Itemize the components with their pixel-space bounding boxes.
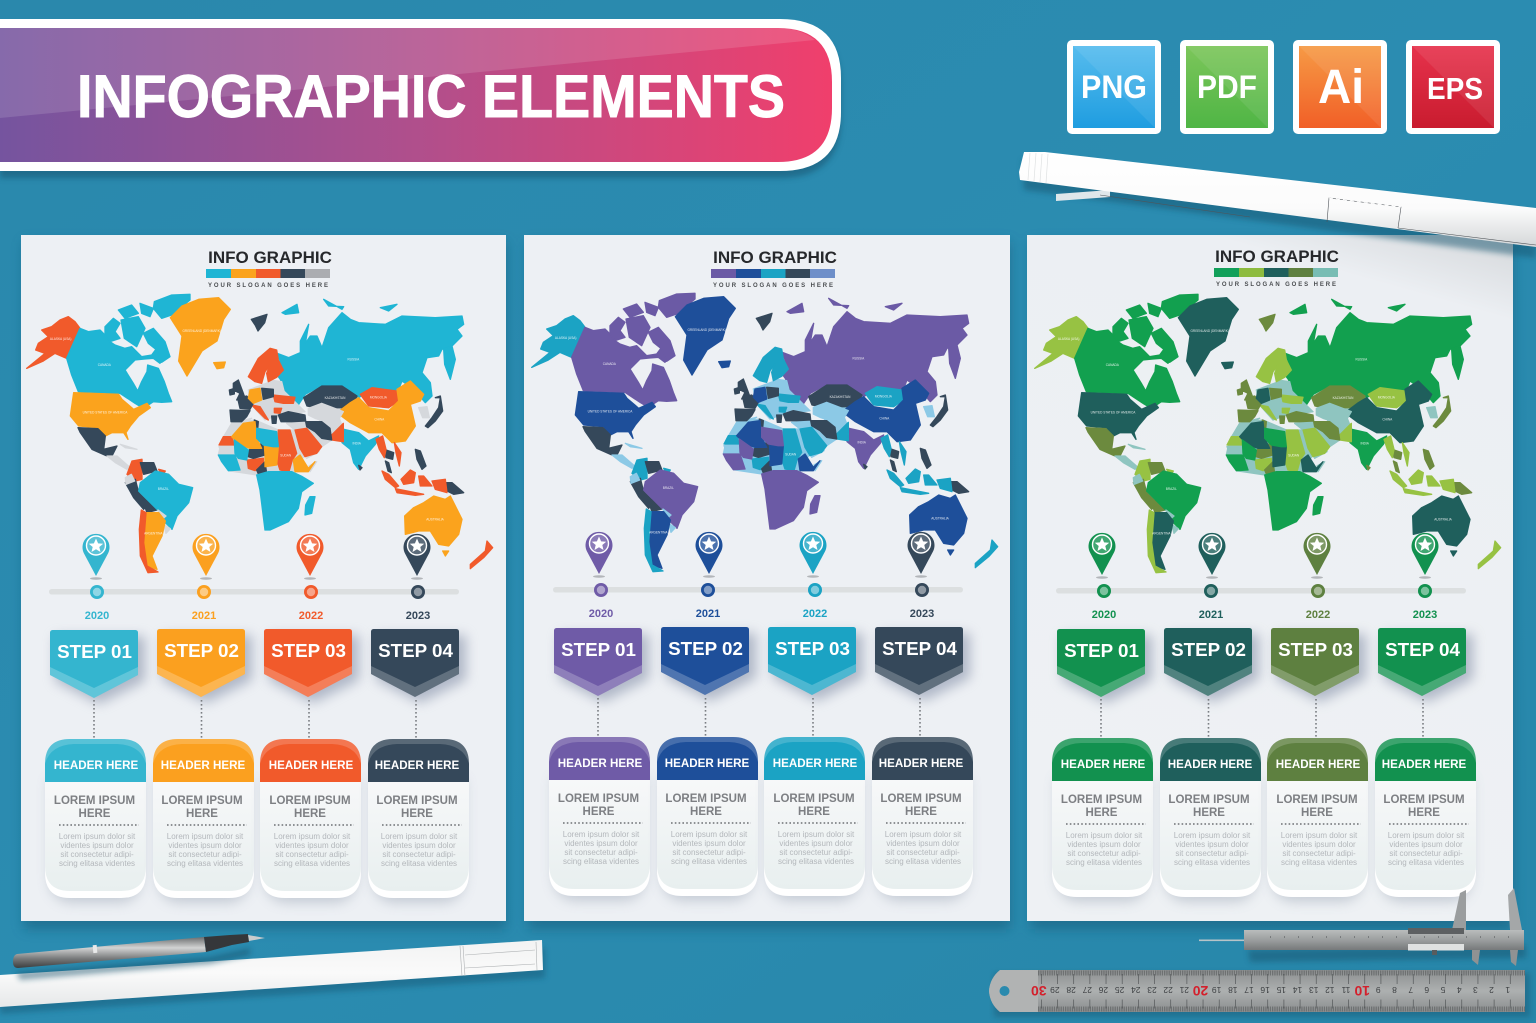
card 3: sit consectetur adipi- xyxy=(1282,849,1356,858)
card 2: Lorem ipsum dolor sit xyxy=(671,830,748,839)
caliper xyxy=(1199,888,1526,966)
panel heading xyxy=(206,248,332,289)
map country labels: GREENLAND (DENMARK) xyxy=(687,328,726,332)
ruler numbers: 2 xyxy=(1489,985,1494,995)
map country labels: CANADA xyxy=(1106,363,1120,367)
ruler numbers: 18 xyxy=(1228,985,1238,995)
ruler numbers: 27 xyxy=(1082,985,1092,995)
step column 2 xyxy=(1160,533,1261,902)
connector 2 xyxy=(200,700,202,738)
world map xyxy=(1035,294,1501,573)
map pin 4 xyxy=(908,532,934,578)
step 04 arrow: STEP 04 xyxy=(378,640,453,661)
card 3: videntes ipsum dolor xyxy=(275,841,349,850)
panel heading: INFO GRAPHIC xyxy=(1215,247,1339,266)
ruler numbers: 10 xyxy=(1354,983,1370,999)
step 02 arrow: STEP 02 xyxy=(668,638,743,659)
map pin 1 xyxy=(82,534,110,580)
panel heading: YOUR SLOGAN GOES HERE xyxy=(1216,282,1336,288)
map country labels: BRAZIL xyxy=(663,486,674,490)
step column 3 xyxy=(1267,533,1368,902)
map pin 3 xyxy=(296,534,324,580)
icon: PDF badge xyxy=(1180,40,1274,134)
map country labels: AUSTRALIA xyxy=(1434,517,1453,521)
step column 3 xyxy=(764,532,865,901)
icon: PNG badge: PNG xyxy=(1081,69,1147,105)
card 3: Lorem ipsum dolor sit xyxy=(1281,831,1358,840)
ruler numbers: 24 xyxy=(1131,985,1141,995)
map country labels: SUDAN xyxy=(785,453,797,457)
connector 2 xyxy=(1208,699,1210,737)
ruler numbers: 7 xyxy=(1408,985,1413,995)
step column 1 xyxy=(45,534,146,903)
card 2: Lorem ipsum dolor sit xyxy=(1174,831,1251,840)
card 3: HERE xyxy=(798,806,830,818)
card 3 xyxy=(1267,738,1368,902)
step 03 arrow: STEP 03 xyxy=(271,640,346,661)
step column 1 xyxy=(1052,533,1153,902)
timeline dot 1 xyxy=(90,585,104,599)
panel heading: YOUR SLOGAN GOES HERE xyxy=(208,283,328,289)
map country labels: INDIA xyxy=(1360,441,1370,445)
timeline dot 2 xyxy=(701,583,715,597)
map country labels: KAZAKHSTAN xyxy=(325,396,346,400)
step 04 arrow xyxy=(875,627,970,701)
timeline dot 1 xyxy=(1097,584,1111,598)
ruler numbers: 16 xyxy=(1260,985,1270,995)
ruler numbers: 4 xyxy=(1457,985,1462,995)
card 4 xyxy=(1375,738,1476,902)
card 3: LOREM IPSUM xyxy=(269,795,351,807)
map pin 1 xyxy=(586,532,612,578)
ruler numbers xyxy=(1031,983,1510,999)
step 04 arrow: STEP 04 xyxy=(1385,639,1460,660)
card 1: videntes ipsum dolor xyxy=(60,841,134,850)
map pin 4 xyxy=(404,534,430,580)
connector 1 xyxy=(93,700,95,738)
timeline dot 4 xyxy=(1418,584,1432,598)
card 1: videntes ipsum dolor xyxy=(564,839,638,848)
card 4: Lorem ipsum dolor sit xyxy=(1388,831,1465,840)
card 3: scing elitasa videntes xyxy=(778,857,854,866)
step 01 arrow: STEP 01 xyxy=(561,639,636,660)
step 02 arrow xyxy=(1164,628,1259,702)
panel: purple blue infographic xyxy=(524,235,1010,921)
map country labels: INDIA xyxy=(857,440,867,444)
ruler numbers: 9 xyxy=(1376,985,1381,995)
map pin 3 xyxy=(800,532,826,578)
card 3 xyxy=(764,737,865,901)
panel heading: YOUR SLOGAN GOES HERE xyxy=(713,283,833,289)
ruler numbers: 3 xyxy=(1473,985,1478,995)
card 2: videntes ipsum dolor xyxy=(168,841,242,850)
timeline dot 2 xyxy=(1204,584,1218,598)
step 04 arrow: STEP 04 xyxy=(882,638,957,659)
card 2: Lorem ipsum dolor sit xyxy=(167,832,244,841)
map country labels xyxy=(1058,329,1453,535)
year 2021: 2021 xyxy=(696,608,720,620)
map country labels: UNITED STATES OF AMERICA xyxy=(588,410,633,414)
card 1: scing elitasa videntes xyxy=(59,859,135,868)
timeline bar xyxy=(49,589,459,594)
map country labels: GREENLAND (DENMARK) xyxy=(182,329,221,333)
panel heading xyxy=(1214,247,1339,288)
card 2: HERE xyxy=(1193,807,1225,819)
panel sheet xyxy=(1027,235,1513,921)
map pin 3 xyxy=(1304,533,1330,579)
year 2020: 2020 xyxy=(1092,609,1116,621)
card 3: HERE xyxy=(294,808,326,820)
year 2022: 2022 xyxy=(299,610,323,622)
card 4: HERE xyxy=(401,808,433,820)
map country labels: ALASKA (USA) xyxy=(1058,337,1079,341)
panel heading xyxy=(711,248,837,289)
card 3: LOREM IPSUM xyxy=(1276,794,1358,806)
map country labels xyxy=(555,328,950,534)
card 2: sit consectetur adipi- xyxy=(168,850,242,859)
card 4: HEADER HERE xyxy=(1382,758,1466,771)
card 1 xyxy=(1052,738,1153,902)
map country labels: RUSSIA xyxy=(1355,357,1368,361)
map country labels: SUDAN xyxy=(1288,454,1300,458)
map country labels: GREENLAND (DENMARK) xyxy=(1190,329,1229,333)
ruler numbers: 1 xyxy=(1505,985,1510,995)
icon: EPS badge xyxy=(1406,40,1500,134)
connector 3 xyxy=(308,700,310,738)
map country labels: UNITED STATES OF AMERICA xyxy=(83,411,128,415)
ruler numbers: 30 xyxy=(1031,983,1047,999)
year 2022: 2022 xyxy=(1306,609,1330,621)
map country labels: KAZAKHSTAN xyxy=(830,395,851,399)
card 1: Lorem ipsum dolor sit xyxy=(59,832,136,841)
map country labels: KAZAKHSTAN xyxy=(1333,396,1354,400)
card 1: scing elitasa videntes xyxy=(1066,858,1142,867)
card 2: LOREM IPSUM xyxy=(665,793,747,805)
map country labels: BRAZIL xyxy=(1166,487,1177,491)
card 4: videntes ipsum dolor xyxy=(382,841,456,850)
card 1: HEADER HERE xyxy=(1061,758,1145,771)
step column 2 xyxy=(153,534,254,903)
connector 3 xyxy=(812,698,814,736)
map pin 1 xyxy=(1088,533,1116,579)
ruler numbers: 12 xyxy=(1325,985,1335,995)
year 2022: 2022 xyxy=(803,608,827,620)
card 3: videntes ipsum dolor xyxy=(1282,840,1356,849)
card 2 xyxy=(1160,738,1261,902)
card 4: HEADER HERE xyxy=(879,757,963,770)
card 3: sit consectetur adipi- xyxy=(275,850,349,859)
card 2: HEADER HERE xyxy=(665,757,749,770)
card 4: HERE xyxy=(905,806,937,818)
ruler numbers: 19 xyxy=(1212,985,1221,995)
map country labels xyxy=(50,329,445,535)
card 2 xyxy=(657,737,758,901)
card 2 xyxy=(153,739,254,903)
ruler numbers: 29 xyxy=(1050,985,1060,995)
card 2: LOREM IPSUM xyxy=(161,795,243,807)
map pin 4 xyxy=(1412,533,1438,579)
step 03 arrow: STEP 03 xyxy=(775,638,850,659)
card 3: scing elitasa videntes xyxy=(274,859,350,868)
year 2021: 2021 xyxy=(192,610,216,622)
card 1: HERE xyxy=(1086,807,1118,819)
map country labels: ALASKA (USA) xyxy=(555,336,576,340)
card 4: scing elitasa videntes xyxy=(381,859,457,868)
timeline dot 4 xyxy=(915,583,929,597)
card 2: scing elitasa videntes xyxy=(671,857,747,866)
card 1: LOREM IPSUM xyxy=(54,795,135,807)
card 1: HERE xyxy=(583,806,615,818)
map country labels: CHINA xyxy=(374,417,385,421)
card 4: LOREM IPSUM xyxy=(880,793,962,805)
card 4: LOREM IPSUM xyxy=(376,795,458,807)
ruler numbers: 14 xyxy=(1293,985,1302,995)
ruler numbers: 26 xyxy=(1098,985,1108,995)
step column 4 xyxy=(368,534,469,903)
map country labels: SUDAN xyxy=(280,454,292,458)
card 1: HERE xyxy=(79,808,111,820)
map country labels: RUSSIA xyxy=(852,356,865,360)
icon: PDF badge: PDF xyxy=(1197,69,1257,105)
card 1: Lorem ipsum dolor sit xyxy=(1066,831,1143,840)
step 03 arrow xyxy=(264,629,359,703)
icon: Ai badge: Ai xyxy=(1318,61,1364,114)
pen xyxy=(13,934,265,980)
step 01 arrow xyxy=(50,630,145,704)
map country labels: AUSTRALIA xyxy=(931,516,950,520)
step 02 arrow xyxy=(157,629,252,703)
card 1: sit consectetur adipi- xyxy=(564,848,638,857)
map country labels: MONGOLIA xyxy=(875,394,893,398)
timeline dot 3 xyxy=(808,583,822,597)
timeline dot 1 xyxy=(594,583,608,597)
map country labels: ARGENTINA xyxy=(1152,531,1171,535)
card 3: LOREM IPSUM xyxy=(773,793,855,805)
map country labels: BRAZIL xyxy=(158,487,169,491)
card 2: LOREM IPSUM xyxy=(1168,794,1250,806)
step 01 arrow xyxy=(554,628,649,702)
card 2: scing elitasa videntes xyxy=(1174,858,1250,867)
step 01 arrow xyxy=(1057,629,1152,703)
step column 3 xyxy=(260,534,361,903)
ruler numbers: 6 xyxy=(1424,985,1429,995)
year 2023: 2023 xyxy=(406,610,430,622)
ruler numbers: 28 xyxy=(1066,985,1076,995)
card 1: LOREM IPSUM xyxy=(558,793,639,805)
step 01 arrow: STEP 01 xyxy=(57,641,132,662)
card 3: HEADER HERE xyxy=(269,759,353,772)
card 4: sit consectetur adipi- xyxy=(886,848,960,857)
panel heading: INFO GRAPHIC xyxy=(208,248,332,267)
card 4: Lorem ipsum dolor sit xyxy=(381,832,458,841)
step column 4 xyxy=(1375,533,1476,902)
step 04 arrow xyxy=(371,629,466,703)
card 3: Lorem ipsum dolor sit xyxy=(778,830,855,839)
timeline dot 2 xyxy=(197,585,211,599)
card 4 xyxy=(872,737,973,901)
card 2: HERE xyxy=(186,808,218,820)
rolled blueprint top right xyxy=(1019,152,1536,258)
card 1 xyxy=(45,739,146,903)
card 1: scing elitasa videntes xyxy=(563,857,639,866)
timeline dot 3 xyxy=(1311,584,1325,598)
connector 1 xyxy=(1100,699,1102,737)
ruler numbers: 21 xyxy=(1179,985,1189,995)
panel: green infographic xyxy=(1027,235,1513,921)
card 2: videntes ipsum dolor xyxy=(672,839,746,848)
map country labels: CHINA xyxy=(1382,417,1393,421)
map country labels: AUSTRALIA xyxy=(426,517,445,521)
ruler numbers: 20 xyxy=(1193,983,1208,999)
connector 1 xyxy=(597,698,599,736)
ruler numbers: 5 xyxy=(1440,985,1445,995)
icon: PNG badge xyxy=(1067,40,1161,134)
card 3 xyxy=(260,739,361,903)
connector 4 xyxy=(1422,699,1424,737)
connector 4 xyxy=(919,698,921,736)
card 2: HERE xyxy=(690,806,722,818)
card 1: sit consectetur adipi- xyxy=(60,850,134,859)
ruler numbers: 23 xyxy=(1147,985,1157,995)
map country labels: ARGENTINA xyxy=(144,531,163,535)
map pin 2 xyxy=(1198,533,1226,579)
step 03 arrow xyxy=(1271,628,1366,702)
map country labels: UNITED STATES OF AMERICA xyxy=(1091,411,1136,415)
card 3: Lorem ipsum dolor sit xyxy=(274,832,351,841)
card 1: LOREM IPSUM xyxy=(1061,794,1142,806)
card 4: Lorem ipsum dolor sit xyxy=(885,830,962,839)
step column 2 xyxy=(657,532,758,901)
card 1: Lorem ipsum dolor sit xyxy=(563,830,640,839)
card 1: HEADER HERE xyxy=(558,757,642,770)
year 2023: 2023 xyxy=(1413,609,1437,621)
map country labels: MONGOLIA xyxy=(1378,395,1396,399)
card 2: scing elitasa videntes xyxy=(167,859,243,868)
step 04 arrow xyxy=(1378,628,1473,702)
card 3: HEADER HERE xyxy=(1276,758,1360,771)
panel sheet xyxy=(524,235,1010,921)
step column 1 xyxy=(549,532,650,901)
step 03 arrow: STEP 03 xyxy=(1278,639,1353,660)
year 2020: 2020 xyxy=(589,608,613,620)
ruler numbers: 13 xyxy=(1309,985,1318,995)
ruler numbers: 22 xyxy=(1163,985,1173,995)
map country labels: RUSSIA xyxy=(347,357,360,361)
card 4: HERE xyxy=(1408,807,1440,819)
card 4: videntes ipsum dolor xyxy=(1389,840,1463,849)
card 3: HERE xyxy=(1301,807,1333,819)
title banner xyxy=(0,19,841,178)
ruler numbers: 15 xyxy=(1276,985,1286,995)
card 1: HEADER HERE xyxy=(54,759,138,772)
year 2023: 2023 xyxy=(910,608,934,620)
panel shadows xyxy=(24,242,1513,929)
year 2020: 2020 xyxy=(85,610,109,622)
card 4: sit consectetur adipi- xyxy=(382,850,456,859)
step 02 arrow: STEP 02 xyxy=(1171,639,1246,660)
map country labels: CANADA xyxy=(98,363,112,367)
panel sheet xyxy=(21,235,506,921)
card 4: scing elitasa videntes xyxy=(1388,858,1464,867)
panel heading: INFO GRAPHIC xyxy=(713,248,837,267)
card 2: HEADER HERE xyxy=(1168,758,1252,771)
ruler numbers: 8 xyxy=(1392,985,1397,995)
map pin 2 xyxy=(192,534,220,580)
map country labels: INDIA xyxy=(352,441,362,445)
card 4: videntes ipsum dolor xyxy=(886,839,960,848)
ruler numbers: 11 xyxy=(1341,985,1350,995)
ruler numbers: 17 xyxy=(1244,985,1254,995)
card 4 xyxy=(368,739,469,903)
card 4: LOREM IPSUM xyxy=(1383,794,1465,806)
card 1: sit consectetur adipi- xyxy=(1067,849,1141,858)
map country labels: MONGOLIA xyxy=(370,395,388,399)
ruler numbers: 25 xyxy=(1115,985,1124,995)
card 3: scing elitasa videntes xyxy=(1281,858,1357,867)
icon: Ai badge xyxy=(1293,40,1387,134)
timeline bar xyxy=(1056,588,1466,594)
timeline dot 4 xyxy=(411,585,425,599)
card 2: sit consectetur adipi- xyxy=(1175,849,1249,858)
banner title text: INFOGRAPHIC ELEMENTS xyxy=(77,63,785,130)
step 02 arrow: STEP 02 xyxy=(164,640,239,661)
card 3: sit consectetur adipi- xyxy=(779,848,853,857)
panel: teal orange infographic xyxy=(21,235,506,921)
map country labels: ALASKA (USA) xyxy=(50,337,71,341)
step 02 arrow xyxy=(661,627,756,701)
card 3: HEADER HERE xyxy=(773,757,857,770)
timeline bar xyxy=(553,587,963,592)
card 2: HEADER HERE xyxy=(161,759,245,772)
card 2: videntes ipsum dolor xyxy=(1175,840,1249,849)
world map xyxy=(27,294,493,573)
step column 4 xyxy=(872,532,973,901)
card 1: videntes ipsum dolor xyxy=(1067,840,1141,849)
connector 4 xyxy=(415,700,417,738)
map country labels: CANADA xyxy=(603,362,617,366)
card 4: scing elitasa videntes xyxy=(885,857,961,866)
map pin 2 xyxy=(696,532,722,578)
map country labels: CHINA xyxy=(879,416,890,420)
steel ruler xyxy=(989,970,1530,1017)
card 2: sit consectetur adipi- xyxy=(672,848,746,857)
card 1 xyxy=(549,737,650,901)
rolled paper bottom left xyxy=(0,940,545,1014)
card 3: videntes ipsum dolor xyxy=(779,839,853,848)
card 4: sit consectetur adipi- xyxy=(1389,849,1463,858)
connector 3 xyxy=(1315,699,1317,737)
step 01 arrow: STEP 01 xyxy=(1064,640,1139,661)
year 2021: 2021 xyxy=(1199,609,1223,621)
icon: EPS badge: EPS xyxy=(1427,71,1483,106)
map country labels: ARGENTINA xyxy=(649,530,668,534)
timeline dot 3 xyxy=(304,585,318,599)
card 4: HEADER HERE xyxy=(375,759,459,772)
step 03 arrow xyxy=(768,627,863,701)
connector 2 xyxy=(704,698,706,736)
world map xyxy=(532,293,998,572)
